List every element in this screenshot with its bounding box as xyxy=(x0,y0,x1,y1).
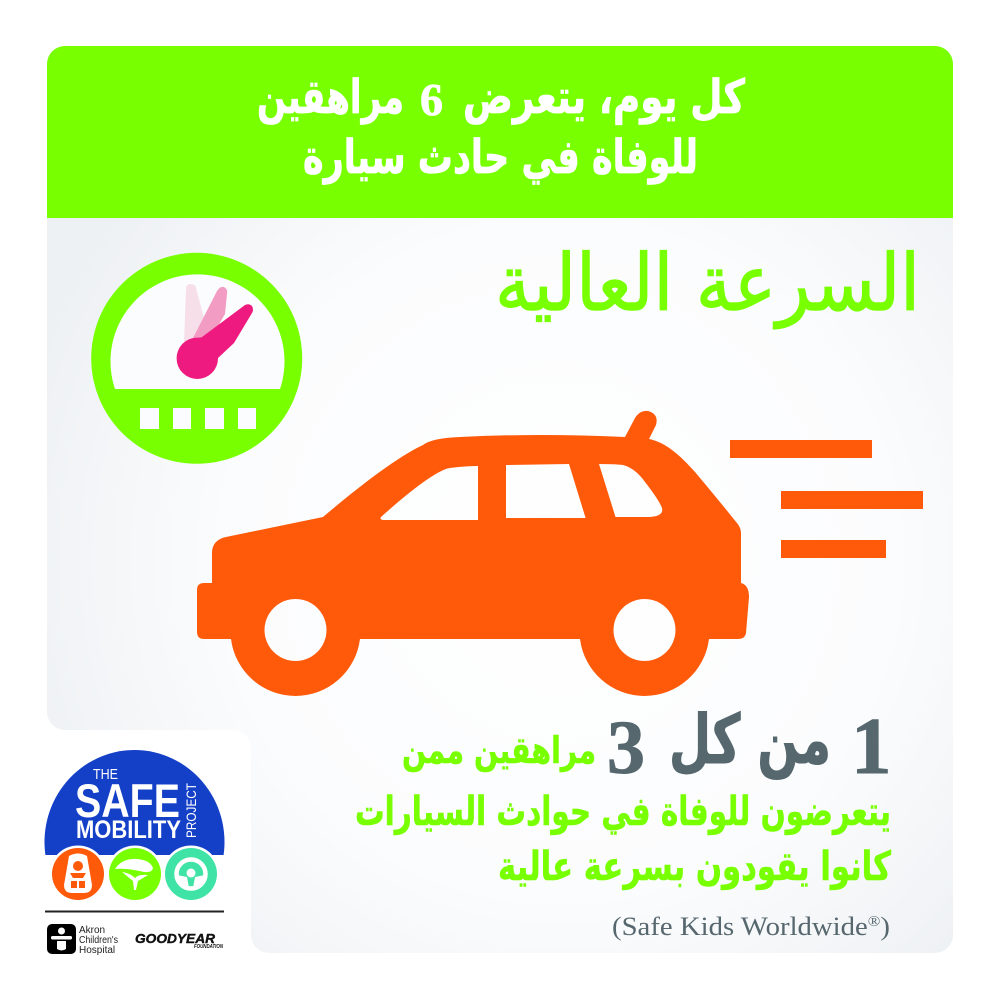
heading line 1: 6 xyxy=(420,74,443,125)
icon: child car seat xyxy=(50,846,106,902)
heading line 1: مراهقين xyxy=(257,70,404,125)
statistic line 3: كانوا يقودون بسرعة عالية xyxy=(498,844,892,890)
panel: main background xyxy=(47,210,953,953)
statistic text block xyxy=(355,701,892,941)
heading line 1 xyxy=(257,70,746,125)
logo dome: SAFE xyxy=(75,774,180,827)
logo: Akron Children's Hospital xyxy=(47,924,118,956)
logo: Safe Mobility Project xyxy=(45,750,224,956)
statistic: 1 in 3 xyxy=(607,701,892,791)
logo: Akron Children's Hospital: Children's xyxy=(79,935,118,946)
statistic: 1 in 3: 3 xyxy=(607,706,645,790)
logo: Akron Children's Hospital: Hospital xyxy=(79,945,115,956)
logo: Goodyear Foundation xyxy=(135,931,223,950)
logo: Akron Children's Hospital: Akron xyxy=(79,925,105,936)
icon: speedometer xyxy=(91,253,302,464)
statistic: 1 in 3: من كل xyxy=(669,701,831,780)
logo divider xyxy=(45,910,224,912)
icon: bicycle helmet xyxy=(106,846,164,902)
panel: green header banner xyxy=(47,46,953,218)
icon: steering wheel xyxy=(162,846,220,902)
logo dome: THE xyxy=(93,766,118,783)
heading line 2: للوفاة في حادث سيارة xyxy=(303,130,698,185)
statistic line 1: مراهقين ممن xyxy=(402,729,596,772)
logo dome xyxy=(45,750,224,855)
title: high speed: السرعة العالية xyxy=(495,239,920,330)
logo: Goodyear Foundation: FOUNDATION xyxy=(194,944,223,950)
icon: orange car xyxy=(197,411,749,696)
logo: Goodyear Foundation: GOODYEAR xyxy=(135,931,216,946)
icon: speed lines xyxy=(730,440,923,558)
logo dome: MOBILITY xyxy=(76,816,181,844)
statistic: 1 in 3: 1 xyxy=(851,701,892,791)
source: ® xyxy=(868,914,880,930)
heading line 1: كل يوم، يتعرض xyxy=(463,70,746,125)
source: ) xyxy=(880,912,890,941)
source: (Safe Kids Worldwide xyxy=(612,912,843,941)
logo dome: PROJECT xyxy=(183,783,199,838)
